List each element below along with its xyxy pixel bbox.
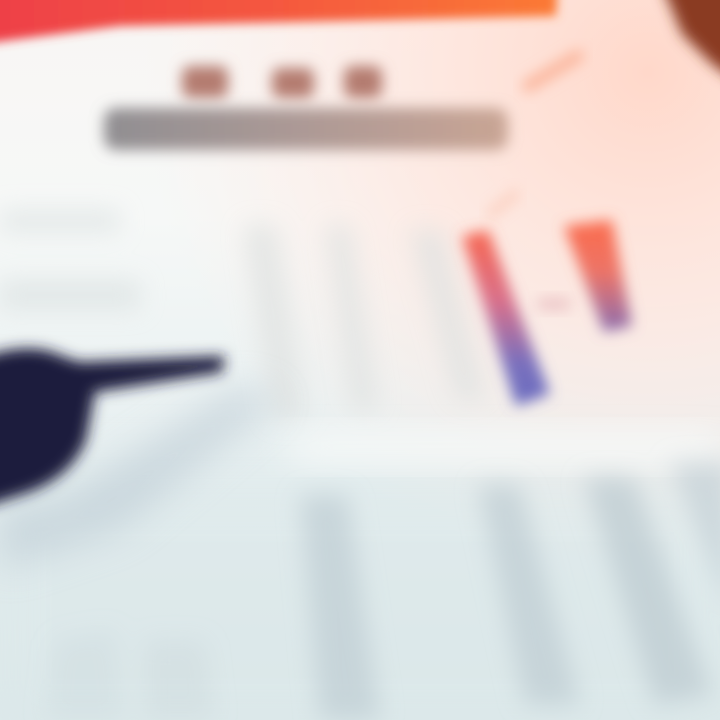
faint text at left <box>0 210 140 310</box>
lower table divider glow <box>290 432 720 462</box>
small mark at top right <box>528 56 578 86</box>
top banner <box>0 0 558 44</box>
lower grey columns <box>45 462 720 720</box>
pen shadow <box>0 385 280 570</box>
heading line two <box>104 108 508 150</box>
small mark above bars <box>488 192 518 216</box>
small connector mark between bars <box>538 298 570 310</box>
chart bar: short red to purple <box>564 220 632 332</box>
chart bar: long red to blue <box>462 230 550 406</box>
heading line one <box>182 66 382 98</box>
faint chart columns <box>244 225 486 420</box>
dark corner object <box>660 0 720 84</box>
dark pen <box>0 348 225 508</box>
